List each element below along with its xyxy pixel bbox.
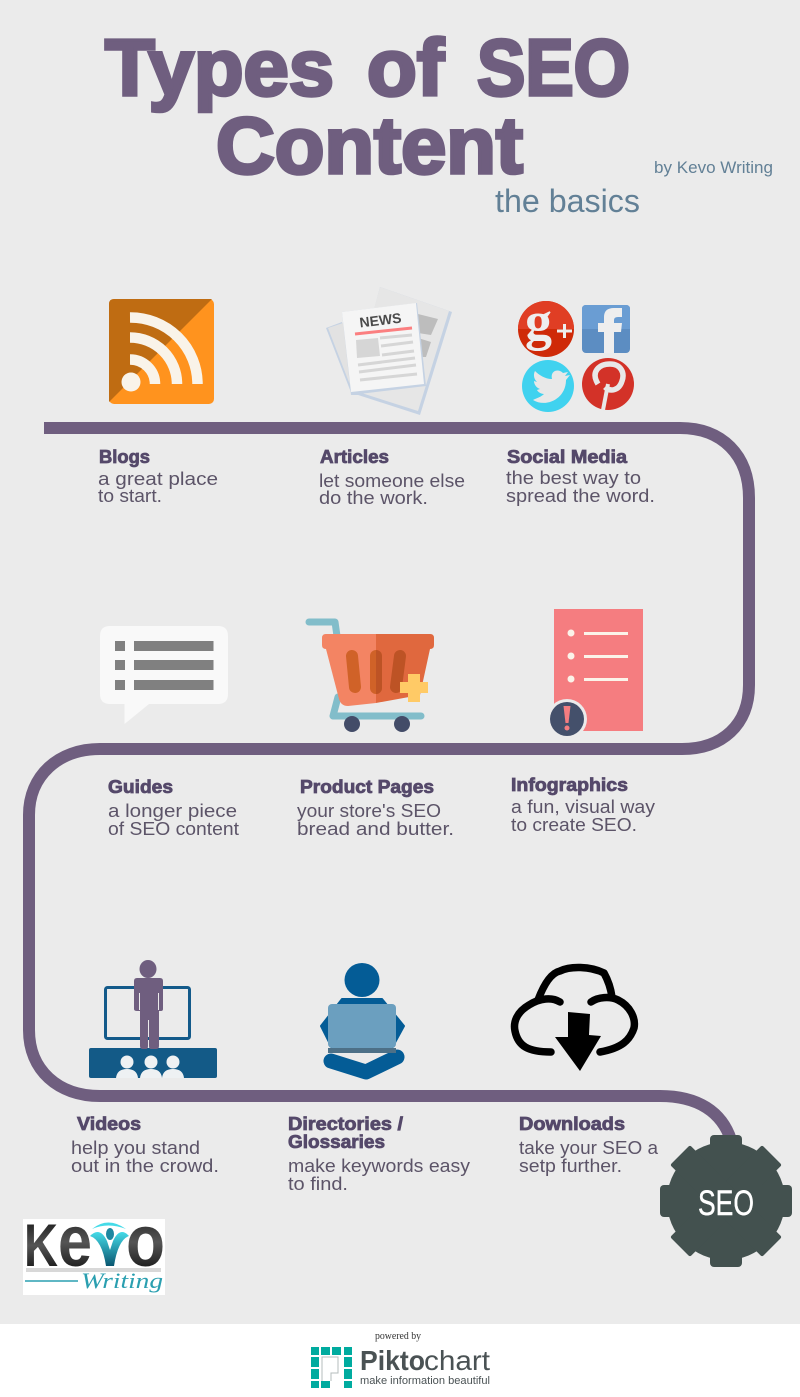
winding path line (29, 428, 749, 1140)
Social Media label (506, 446, 655, 506)
Kevo Writing logo (23, 1202, 165, 1295)
footer: powered by Piktochart: Pikto (360, 1345, 425, 1376)
Piktochart logo mark (311, 1347, 352, 1388)
Infographics label: Infographics (511, 774, 628, 795)
Blogs label (98, 446, 218, 506)
icon: Twitter (522, 360, 574, 412)
icon: infographic document with alert (547, 609, 643, 739)
Articles label: Articles (320, 446, 389, 467)
Product Pages label: bread and butter. (297, 818, 454, 839)
icon: SEO gear: SEO (698, 1184, 754, 1223)
icon: social media group (518, 291, 634, 412)
Articles label: let someone else (319, 470, 465, 491)
Guides label: of SEO content (108, 818, 239, 839)
title: of (367, 23, 444, 112)
Blogs label: a great place (98, 468, 218, 489)
footer: powered by Piktochart: make information beautiful (360, 1375, 490, 1387)
Directories / Glossaries label: to find. (288, 1173, 348, 1194)
title: Content (216, 101, 523, 190)
footer: powered by Piktochart: chart (424, 1345, 490, 1376)
subtitle: the basics: the basics (495, 183, 640, 219)
Infographics label: to create SEO. (511, 814, 637, 835)
icon: RSS feed (109, 299, 214, 404)
icon: shopping cart (309, 622, 434, 732)
icon: cloud download (515, 967, 634, 1071)
Kevo Writing logo: K (24, 1212, 58, 1279)
title: Types (105, 23, 334, 112)
Product Pages label (297, 776, 454, 839)
Guides label (108, 776, 239, 839)
Product Pages label: your store's SEO (297, 800, 441, 821)
Downloads label: Downloads (519, 1113, 625, 1134)
Infographics label: a fun, visual way (511, 796, 656, 817)
Blogs label: to start. (98, 485, 162, 506)
title: SEO (477, 23, 630, 112)
Directories / Glossaries label: make keywords easy (288, 1155, 471, 1176)
Social Media label: the best way to (506, 467, 641, 488)
Downloads label: setp further. (519, 1155, 622, 1176)
icon: newspaper: NEWS (359, 310, 402, 331)
Videos label (71, 1113, 219, 1176)
icon: SEO gear (660, 1135, 792, 1267)
byline: by Kevo Writing (654, 158, 773, 177)
icon: person with laptop (321, 963, 404, 1072)
footer: powered by Piktochart (311, 1331, 490, 1388)
icon: Facebook (582, 305, 630, 353)
Videos label: help you stand (71, 1137, 200, 1158)
Articles label (319, 446, 465, 508)
Product Pages label: Product Pages (300, 776, 434, 797)
icon: video presenter on stage (89, 960, 217, 1078)
Social Media label: spread the word. (506, 485, 655, 506)
Videos label: out in the crowd. (71, 1155, 219, 1176)
Downloads label (519, 1113, 659, 1176)
Videos label: Videos (77, 1113, 141, 1134)
icon: newspaper (326, 287, 452, 415)
Infographics label (511, 774, 656, 835)
icon: Pinterest (582, 358, 634, 410)
icon: speech bubble list (100, 626, 228, 724)
Social Media label: Social Media (507, 446, 628, 467)
Kevo Writing logo: Writing (81, 1268, 163, 1293)
Guides label: a longer piece (108, 800, 237, 821)
Directories / Glossaries label: Directories / (288, 1113, 403, 1134)
icon: Google plus: g (525, 291, 552, 351)
Blogs label: Blogs (99, 446, 150, 467)
Kevo Writing logo: e (58, 1202, 92, 1282)
title (105, 23, 630, 190)
Directories / Glossaries label: Glossaries (288, 1131, 385, 1152)
Guides label: Guides (108, 776, 173, 797)
Directories / Glossaries label (288, 1113, 471, 1194)
Kevo Writing logo: o (126, 1202, 165, 1282)
footer: powered by Piktochart: powered by (375, 1331, 422, 1342)
Articles label: do the work. (319, 487, 428, 508)
Downloads label: take your SEO a (519, 1137, 659, 1158)
